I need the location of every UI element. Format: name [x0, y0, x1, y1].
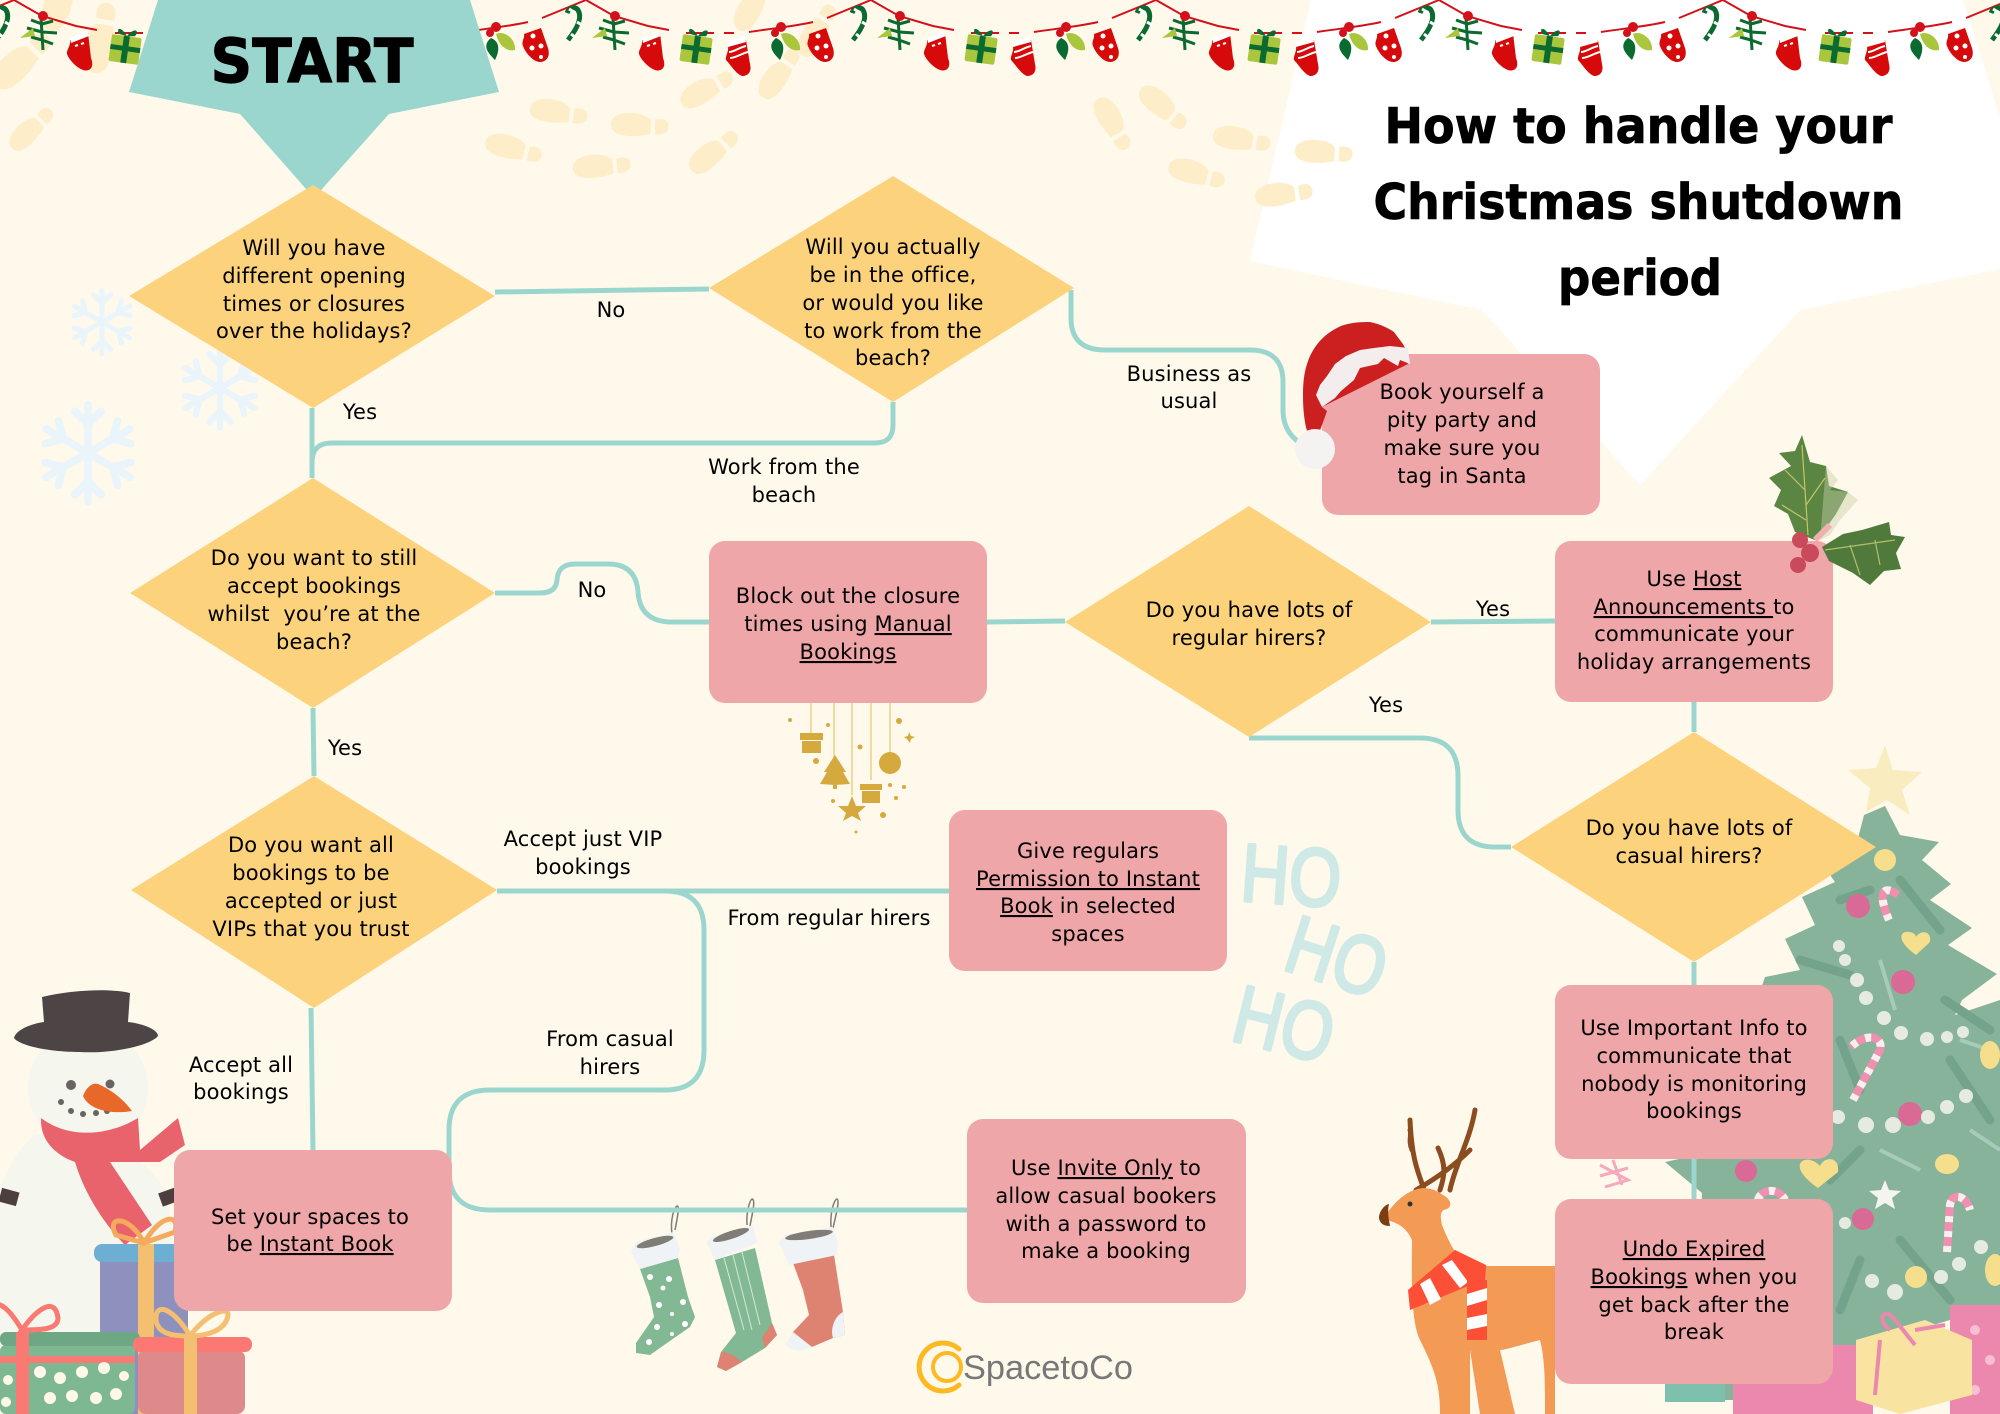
snowflakes	[39, 290, 260, 501]
title: How to handle your	[1384, 98, 1893, 155]
garland	[0, 0, 2000, 76]
label: From casual hirers: hirers	[580, 1055, 640, 1079]
box: pity party: Book yourself a	[1379, 380, 1545, 404]
box: permission to instant book: Give regulars	[1017, 839, 1159, 863]
box: host announcements: Announcements to	[1594, 595, 1794, 619]
illustration: stockings	[631, 1199, 845, 1371]
box: important info: Use Important Info to	[1580, 1016, 1808, 1040]
HO HO HO lettering: HO	[1275, 899, 1398, 1016]
label: Yes (to casual hirers): Yes	[1368, 693, 1403, 717]
decision: regular hirers	[1065, 506, 1431, 737]
box: permission to instant book: spaces	[1051, 922, 1125, 946]
label: Yes (regular hirers): Yes	[1475, 597, 1510, 621]
label: Work from the beach: beach	[752, 483, 816, 507]
decision: different opening times: Will you have	[242, 236, 386, 260]
box: invite only: with a password to	[1006, 1212, 1206, 1236]
label: No (second): No	[578, 578, 606, 602]
illustration: hanging gold ornaments	[788, 703, 915, 834]
box: undo expired bookings	[1555, 1199, 1833, 1384]
box: pity party: tag in Santa	[1397, 464, 1527, 488]
decision: regular hirers: Do you have lots of	[1146, 598, 1353, 622]
box: important info: bookings	[1646, 1099, 1742, 1123]
connectors	[311, 289, 1694, 1210]
decision: in the office	[709, 176, 1074, 402]
box: permission to instant book: Permission to Instant	[976, 867, 1200, 891]
box: invite only: Use Invite Only to	[1011, 1156, 1201, 1180]
start marker	[129, 0, 499, 198]
label: Accept all bookings: Accept all	[189, 1053, 293, 1077]
HO HO HO lettering	[1225, 828, 1398, 1081]
logo: SpacetoCo	[919, 1343, 1133, 1391]
decision: casual hirers: casual hirers?	[1615, 844, 1763, 868]
HO HO HO lettering: HO	[1238, 828, 1344, 925]
decision: in the office: Will you actually	[805, 235, 981, 259]
box: undo expired bookings: Undo Expired	[1623, 1237, 1765, 1261]
box: undo expired bookings: Bookings when you	[1591, 1265, 1797, 1289]
illustration: snowman with gifts	[0, 990, 252, 1414]
illustration: santa hat	[1295, 322, 1410, 469]
decision: accept bookings at the beach	[130, 478, 495, 708]
decision: different opening times: different opening	[222, 264, 406, 288]
box: manual bookings: Block out the closure	[736, 584, 960, 608]
decision: different opening times: times or closures	[223, 292, 405, 316]
decision: casual hirers	[1511, 732, 1876, 962]
box: undo expired bookings: get back after the	[1598, 1293, 1790, 1317]
label: From regular hirers: From regular hirers	[727, 906, 931, 930]
decision: accept bookings at the beach: accept bookings	[227, 574, 401, 598]
decision: casual hirers: Do you have lots of	[1586, 816, 1793, 840]
decision: different opening times	[129, 185, 495, 408]
title backdrop star	[1250, 0, 2000, 485]
label: Work from the beach: Work from the	[708, 455, 860, 479]
label: Business as usual: Business as	[1127, 362, 1251, 386]
label: No (first): No	[597, 298, 625, 322]
illustration: holly	[1769, 435, 1905, 585]
illustration: reindeer	[1379, 1110, 1555, 1414]
box: undo expired bookings: break	[1664, 1320, 1725, 1344]
box: host announcements	[1555, 541, 1833, 702]
label: Business as usual: usual	[1160, 389, 1218, 413]
box: important info	[1555, 985, 1833, 1159]
start marker: START	[210, 26, 414, 97]
decision: in the office: to work from the	[804, 319, 982, 343]
footprints	[0, 0, 1353, 209]
title: period	[1558, 250, 1722, 307]
decision: all bookings or VIPs	[131, 776, 497, 1008]
box: invite only: make a booking	[1021, 1239, 1191, 1263]
box: manual bookings: times using Manual	[744, 612, 952, 636]
decision: regular hirers: regular hirers?	[1172, 626, 1326, 650]
logo: SpacetoCo: SpacetoCo	[963, 1349, 1133, 1387]
title: Christmas shutdown	[1373, 174, 1903, 231]
illustration: Christmas tree	[1600, 745, 2000, 1414]
decision: all bookings or VIPs: VIPs that you trust	[212, 917, 410, 941]
decision: accept bookings at the beach: Do you want to still	[211, 546, 417, 570]
box: instant book: Set your spaces to	[211, 1205, 409, 1229]
decision: different opening times: over the holidays?	[216, 319, 412, 343]
label: Accept just VIP bookings: Accept just VIP	[504, 827, 662, 851]
box: pity party	[1322, 354, 1600, 515]
box: invite only: allow casual bookers	[995, 1184, 1217, 1208]
box: permission to instant book: Book in selected	[1000, 894, 1176, 918]
decision: all bookings or VIPs: Do you want all	[228, 833, 394, 857]
box: host announcements: communicate your	[1594, 622, 1794, 646]
label: From casual hirers: From casual	[546, 1027, 674, 1051]
decision: in the office: beach?	[855, 346, 931, 370]
box: pity party: make sure you	[1384, 436, 1540, 460]
label: Accept just VIP bookings: bookings	[535, 855, 631, 879]
box: manual bookings	[709, 541, 987, 703]
label: Accept all bookings: bookings	[193, 1080, 289, 1104]
decision: all bookings or VIPs: accepted or just	[225, 889, 397, 913]
decision: in the office: be in the office,	[809, 263, 977, 287]
decision: accept bookings at the beach: whilst you’re at the	[207, 602, 421, 626]
label: Yes (to VIP question): Yes	[327, 736, 362, 760]
box: host announcements: Use Host	[1647, 567, 1741, 591]
box: host announcements: holiday arrangements	[1577, 650, 1811, 674]
label: Yes (first): Yes	[342, 400, 377, 424]
box: manual bookings: Bookings	[800, 640, 896, 664]
box: important info: nobody is monitoring	[1581, 1072, 1807, 1096]
decision: all bookings or VIPs: bookings to be	[232, 861, 390, 885]
box: instant book: be Instant Book	[226, 1232, 394, 1256]
box: invite only	[967, 1119, 1246, 1303]
box: important info: communicate that	[1596, 1044, 1792, 1068]
decision: accept bookings at the beach: beach?	[276, 630, 352, 654]
box: pity party: pity party and	[1387, 408, 1537, 432]
decision: in the office: or would you like	[802, 291, 984, 315]
box: instant book	[174, 1150, 452, 1311]
HO HO HO lettering: HO	[1225, 969, 1344, 1081]
box: permission to instant book	[949, 810, 1227, 971]
